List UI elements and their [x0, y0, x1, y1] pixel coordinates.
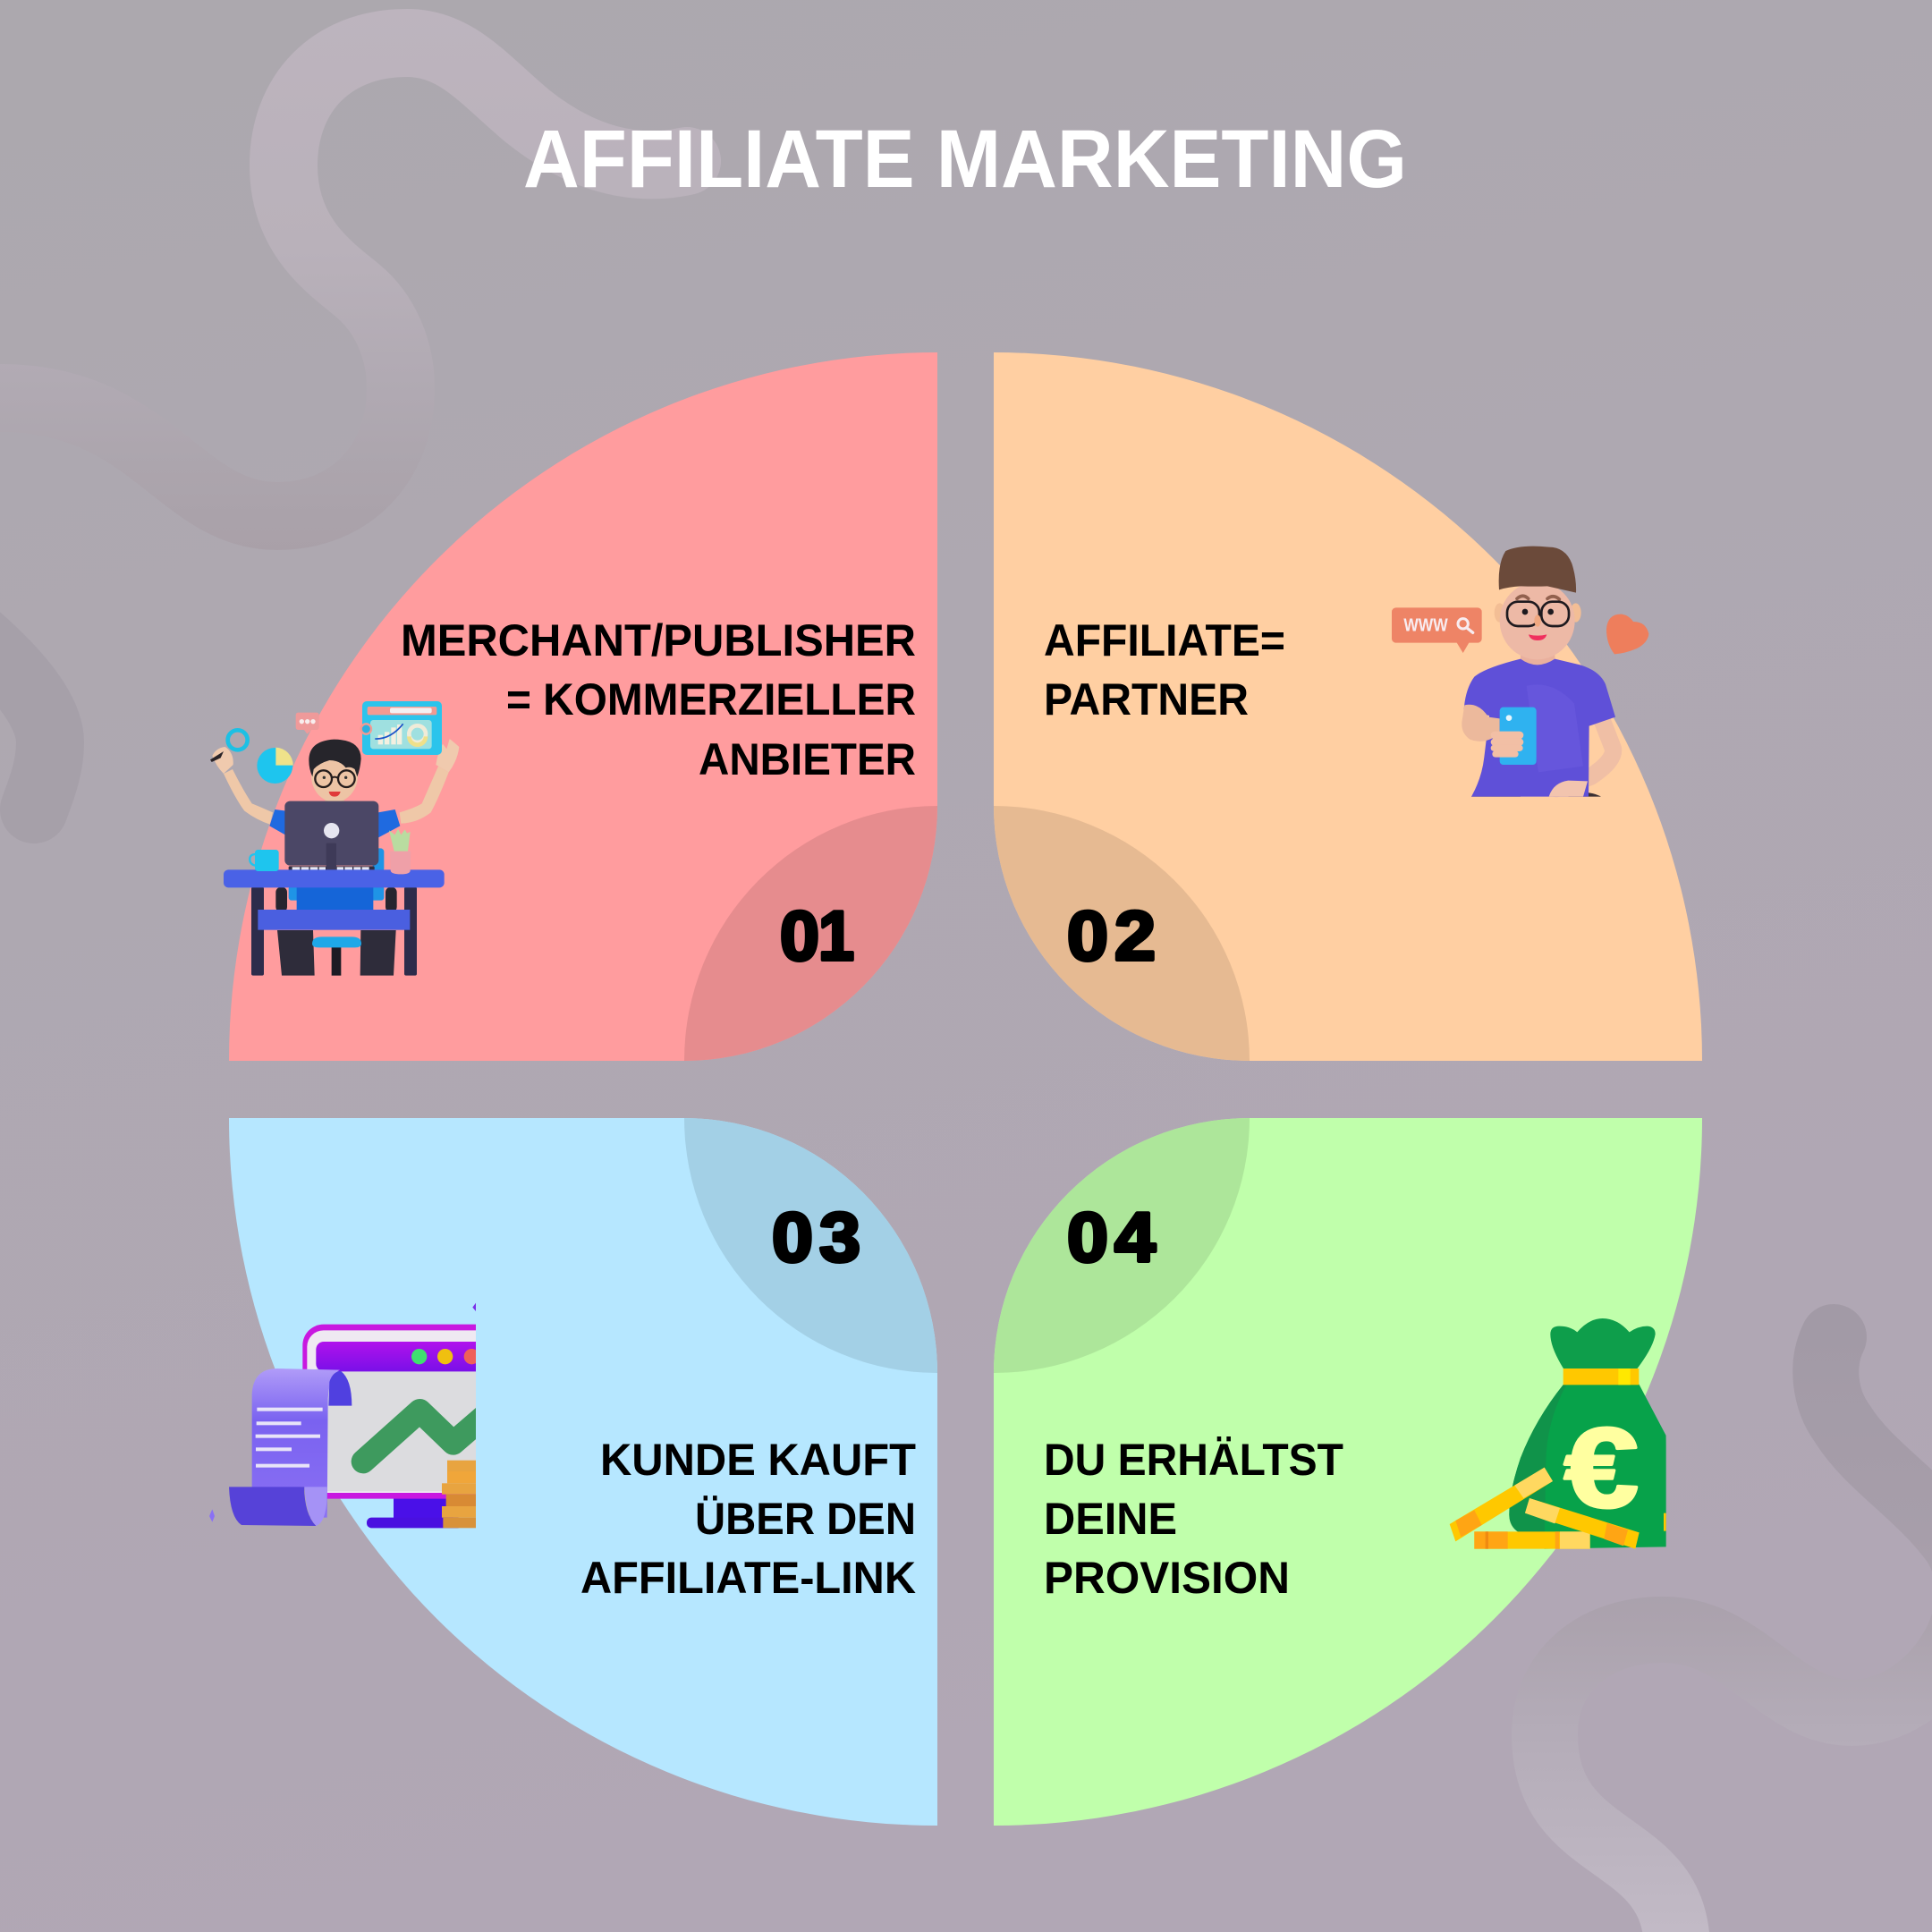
text: commission: PROVISION — [1044, 1553, 1290, 1603]
text: customer: ÜBER DEN — [695, 1494, 916, 1544]
number badge: 01: 0 — [780, 896, 819, 975]
text: affiliate — [1044, 615, 1285, 724]
icon: man at desk with laptop — [210, 701, 459, 976]
panel: 02 affiliate — [994, 352, 1702, 1061]
text: commission: DEINE — [1044, 1494, 1177, 1544]
number badge: 04: 4 — [1114, 1198, 1156, 1276]
text: affiliate: AFFILIATE= — [1044, 615, 1285, 665]
number badge: 01: 1 — [818, 896, 854, 975]
text: customer: KUNDE KAUFT — [600, 1435, 916, 1485]
background swirl: left edge — [0, 626, 50, 809]
text: merchant: = KOMMERZIELLER — [506, 674, 916, 724]
text: customer: AFFILIATE-LINK — [580, 1553, 916, 1603]
text: merchant: MERCHANT/PUBLISHER — [401, 615, 916, 665]
text: merchant: ANBIETER — [699, 734, 916, 784]
title: AFFILIATE MARKETING — [523, 114, 1407, 205]
icon: man with phone — [1392, 547, 1648, 797]
number badge: 03: 3 — [819, 1198, 860, 1276]
text: customer — [580, 1435, 916, 1603]
www search bubble: WWW — [1403, 615, 1448, 635]
number badge: 02: 2 — [1114, 896, 1156, 975]
text: commission: DU ERHÄLTST — [1044, 1435, 1343, 1485]
number badge: 02: 0 — [1067, 896, 1108, 975]
number badge: 01 — [684, 806, 937, 1061]
text: commission — [1044, 1435, 1343, 1603]
number badge: 02 — [994, 806, 1250, 1061]
panel: 03 customer — [229, 1118, 937, 1826]
icon: browser window with chart, receipt and coins — [209, 1302, 476, 1528]
heart — [1606, 614, 1648, 654]
euro symbol: € — [1564, 1404, 1639, 1531]
www search bubble — [1392, 607, 1482, 653]
number badge: 03: 0 — [772, 1198, 813, 1276]
text: affiliate: PARTNER — [1044, 674, 1249, 724]
panel: 04 commission — [994, 1118, 1702, 1826]
text: merchant — [401, 615, 916, 784]
background swirl: bottom right — [1545, 1337, 1932, 1932]
icon: money bag with euro and coins — [1450, 1318, 1670, 1549]
number badge: 03 — [684, 1118, 937, 1373]
number badge: 04: 0 — [1067, 1198, 1108, 1276]
panel: 01 merchant — [229, 352, 937, 1061]
background swirl: top left — [0, 43, 687, 516]
number badge: 04 — [994, 1118, 1250, 1373]
coins — [1450, 1468, 1640, 1549]
